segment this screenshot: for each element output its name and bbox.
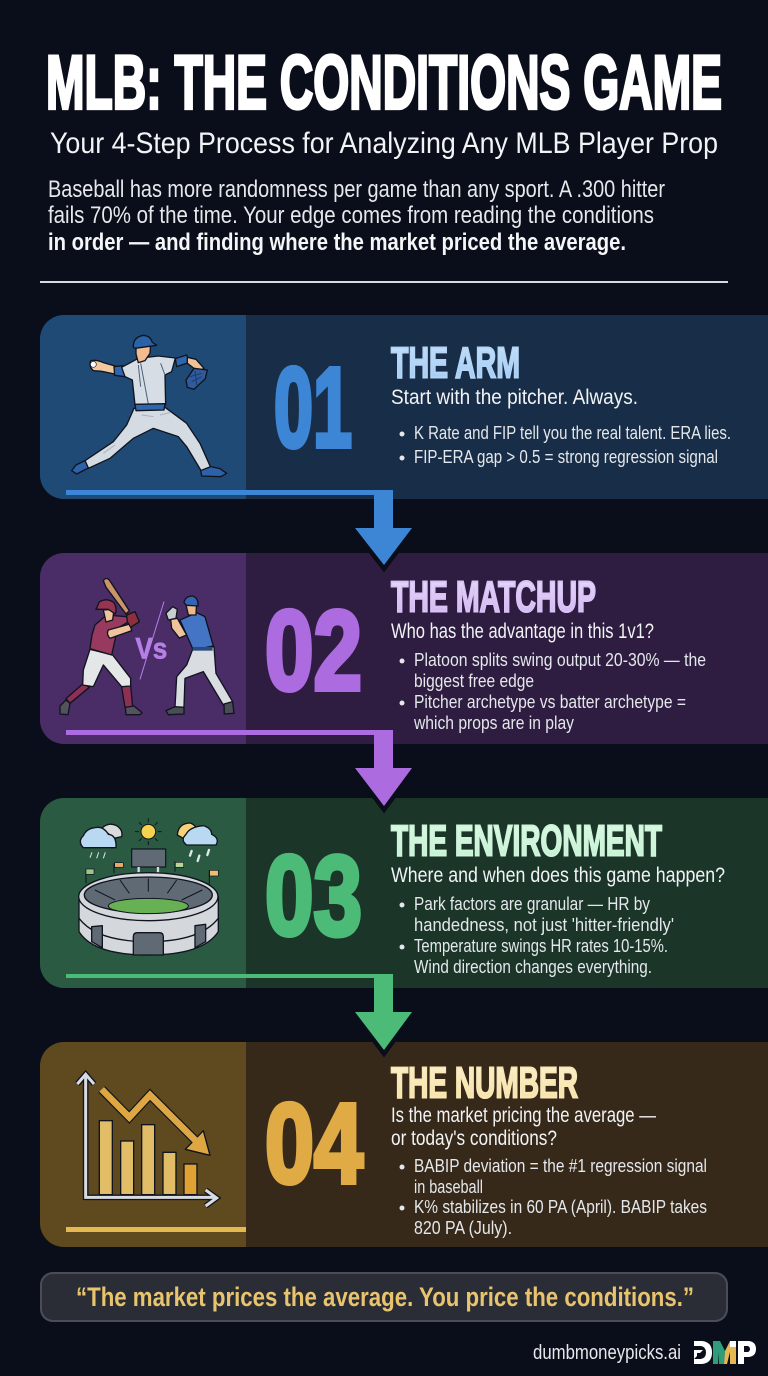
bullets: K% stabilizes in 60 PA (April). BABIP takes (414, 1196, 707, 1217)
icon: pitcher (72, 335, 227, 477)
bullets: biggest free edge (414, 670, 534, 691)
bullets (400, 649, 706, 733)
bullets (400, 1155, 707, 1238)
icon: stadium with weather (79, 818, 218, 955)
heading: the arm: THE ARM (391, 338, 520, 388)
intro text (48, 176, 665, 256)
bullets: BABIP deviation = the #1 regression signal (414, 1155, 707, 1176)
panel 3: the environment (40, 798, 768, 988)
number 03: 03 (265, 832, 362, 958)
bullets: which props are in play (413, 712, 575, 733)
number 01: 01 (274, 344, 352, 470)
bullets: 820 PA (July). (414, 1217, 512, 1238)
icon: batter vs pitcher (60, 578, 234, 715)
gold rule (66, 1227, 246, 1232)
tagline: Who has the advantage in this 1v1? (391, 620, 654, 643)
icon: falling bar chart (77, 1074, 217, 1206)
bullets: Platoon splits swing output 20-30% — the (414, 649, 706, 670)
panel 1: the arm (40, 315, 768, 499)
bullets: Pitcher archetype vs batter archetype = (414, 691, 686, 712)
intro text: fails 70% of the time. Your edge comes from reading the conditions (48, 202, 654, 229)
bullets (400, 893, 674, 977)
icon: batter vs pitcher: Vs (135, 633, 167, 666)
bullets: in baseball (414, 1176, 483, 1197)
logo: DMP (694, 1341, 756, 1364)
bullets (400, 422, 731, 467)
intro text: in order — and finding where the market priced the average. (48, 229, 626, 256)
bullets: Park factors are granular — HR by (414, 893, 651, 914)
arrow: step 1 to 2 (66, 490, 412, 565)
number 04: 04 (265, 1080, 363, 1206)
arrow: step 3 to 4 (66, 974, 412, 1050)
bullets: handedness, not just 'hitter-friendly' (414, 914, 674, 935)
heading: the number: THE NUMBER (391, 1058, 578, 1108)
tagline: or today's conditions? (391, 1127, 557, 1150)
tagline: Start with the pitcher. Always. (391, 386, 638, 409)
number 02: 02 (265, 588, 362, 714)
tagline (391, 1104, 656, 1150)
bullets: Wind direction changes everything. (414, 956, 652, 977)
arrow: step 2 to 3 (66, 730, 412, 806)
callout: closing quote (41, 1273, 727, 1321)
bullets: Temperature swings HR rates 10-15%. (414, 935, 668, 956)
footer url: dumbmoneypicks.ai (533, 1342, 681, 1364)
tagline: Is the market pricing the average — (391, 1104, 656, 1127)
heading: the matchup: THE MATCHUP (391, 572, 596, 622)
panel 4: the number (40, 1042, 768, 1247)
panel 2: the matchup (40, 553, 768, 744)
